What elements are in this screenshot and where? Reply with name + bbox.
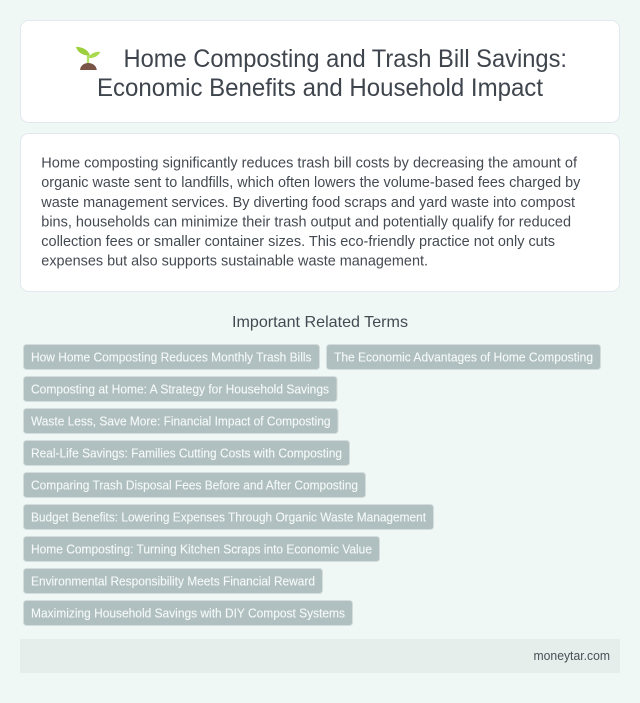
tag: diy compost systems: [24, 600, 352, 626]
title text: Home Composting and Trash Bill Savings:: [124, 45, 567, 73]
paragraph text: bins, households can minimize their trash output and potentially qualify for reduced: [41, 214, 571, 230]
tag: real-life savings: [24, 440, 350, 466]
tag: economic advantages: The Economic Advantages of Home Composting: [334, 350, 593, 364]
tag: kitchen scraps: Home Composting: Turning Kitchen Scraps into Economic Value: [31, 542, 372, 556]
tag: economic advantages: [326, 344, 600, 370]
tag: budget benefits: [24, 504, 434, 530]
footer bar: [20, 639, 620, 673]
tag: environmental responsibility: [24, 568, 322, 594]
title text: Economic Benefits and Household Impact: [97, 74, 543, 102]
tag: waste less: [24, 408, 338, 434]
tag: diy compost systems: Maximizing Household Savings with DIY Compost Systems: [31, 606, 345, 620]
tag: budget benefits: Budget Benefits: Lowering Expenses Through Organic Waste Management: [31, 510, 426, 524]
paragraph text: collection fees or smaller container sizes. This eco-friendly practice not only cuts: [41, 234, 555, 250]
title text: [97, 45, 567, 102]
tag: real-life savings: Real-Life Savings: Families Cutting Costs with Composting: [31, 446, 342, 460]
tag: monthly trash bills: [24, 344, 320, 370]
tag: household savings: [24, 376, 337, 402]
paragraph text: [40, 156, 581, 269]
tag list: [24, 344, 600, 626]
tag: kitchen scraps: [24, 536, 380, 562]
panel: intro paragraph: [20, 134, 620, 292]
paragraph text: Home composting significantly reduces trash bill costs by decreasing the amount of: [41, 156, 578, 172]
tag: environmental responsibility: Environmental Responsibility Meets Financial Reward: [31, 574, 315, 588]
tag: monthly trash bills: How Home Composting Reduces Monthly Trash Bills: [31, 350, 312, 364]
heading: important related terms: Important Related Terms: [232, 314, 408, 331]
paragraph text: waste management services. By diverting food scraps and yard waste into compost: [40, 195, 575, 211]
panel: title card: [20, 20, 620, 122]
footer source text: moneytar.com: [534, 649, 610, 663]
icon: sprout: [76, 47, 100, 70]
paragraph text: expenses but also supports sustainable waste management.: [41, 253, 428, 269]
paragraph text: organic waste sent to landfills, which often lowers the volume-based fees charged by: [41, 175, 581, 191]
tag: waste less: Waste Less, Save More: Financial Impact of Composting: [31, 414, 330, 428]
tag: comparing fees: Comparing Trash Disposal Fees Before and After Composting: [31, 478, 358, 492]
tag: household savings: Composting at Home: A Strategy for Household Savings: [31, 382, 329, 396]
tag: comparing fees: [24, 472, 366, 498]
